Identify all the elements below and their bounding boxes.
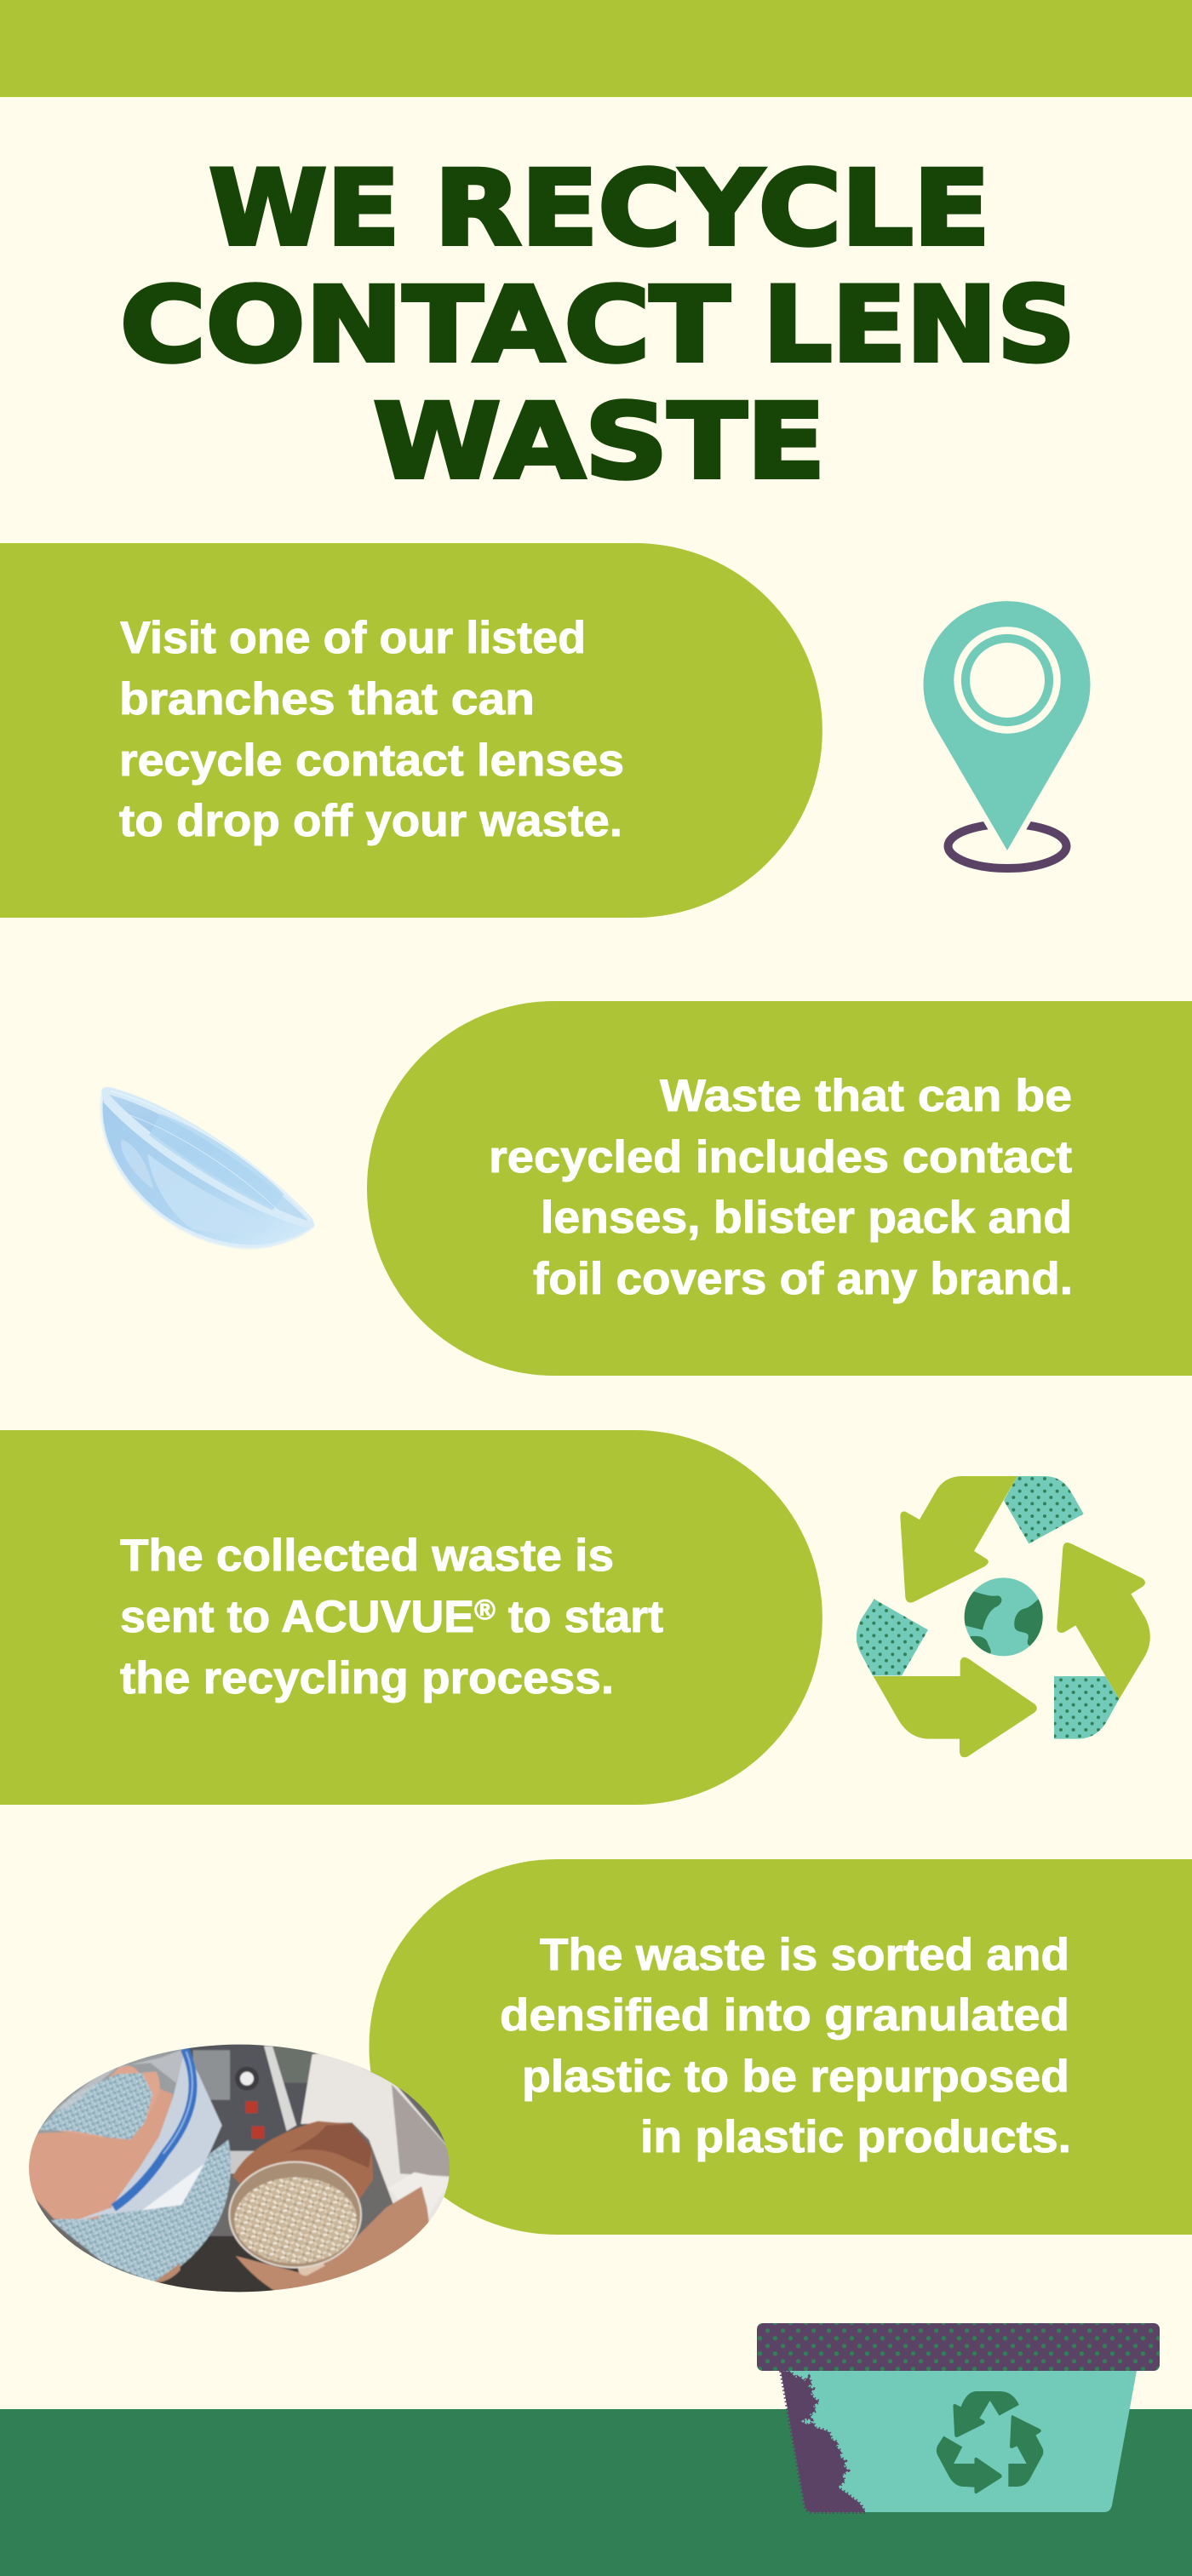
step 2 text: foil covers of any brand. — [533, 1254, 1073, 1304]
title: CONTACT — [120, 266, 730, 385]
step 1 text: branches that can — [119, 674, 535, 724]
icon: recycling bin — [757, 2323, 1160, 2512]
title: RECYCLE — [434, 148, 990, 269]
step 4 text — [500, 1930, 1071, 2162]
step 4 text: densified into granulated — [500, 1990, 1069, 2041]
step 3 text: The collected waste is — [120, 1531, 614, 1581]
step 1 text: Visit one of our listed — [120, 613, 586, 663]
step 2 text: recycled includes contact — [489, 1132, 1072, 1182]
icon: location pin — [923, 601, 1090, 868]
step 3 text — [120, 1531, 663, 1703]
panel: step 1 visit a branch — [0, 543, 822, 918]
photo: hands holding recycled plastic pellets — [29, 2045, 450, 2292]
bin recycling symbol — [937, 2391, 1043, 2493]
step 1 text — [119, 613, 624, 846]
step 3 text: ® — [474, 1594, 496, 1625]
step 3 text: the recycling process. — [120, 1653, 614, 1703]
title: LENS — [763, 266, 1075, 385]
title: WE — [209, 148, 400, 269]
bottom band — [0, 2409, 1192, 2576]
step 3 text: sent to ACUVUE — [120, 1592, 469, 1642]
title: WASTE — [373, 381, 826, 502]
title — [120, 148, 1075, 502]
step 3 text: to start — [496, 1592, 663, 1642]
step 2 text: Waste that can be — [660, 1071, 1072, 1121]
panel: step 4 sorted and densified — [370, 1859, 1192, 2235]
step 4 text: in plastic products. — [640, 2112, 1071, 2162]
icon: recycling arrows with globe — [857, 1476, 1150, 1757]
step 4 text: plastic to be repurposed — [522, 2052, 1069, 2102]
step 2 text — [489, 1071, 1073, 1304]
step 4 text: The waste is sorted and — [540, 1930, 1069, 1980]
icon: globe — [960, 1577, 1046, 1656]
bin worn paint — [781, 2371, 865, 2512]
panel: step 3 sent to ACUVUE — [0, 1430, 822, 1805]
panel: step 2 accepted waste — [367, 1001, 1192, 1376]
icon: contact lens — [100, 1087, 314, 1249]
step 1 text: to drop off your waste. — [119, 796, 622, 846]
step 2 text: lenses, blister pack and — [541, 1193, 1072, 1243]
top banner — [0, 0, 1192, 97]
step 1 text: recycle contact lenses — [119, 736, 624, 786]
bin lid — [757, 2323, 1160, 2371]
